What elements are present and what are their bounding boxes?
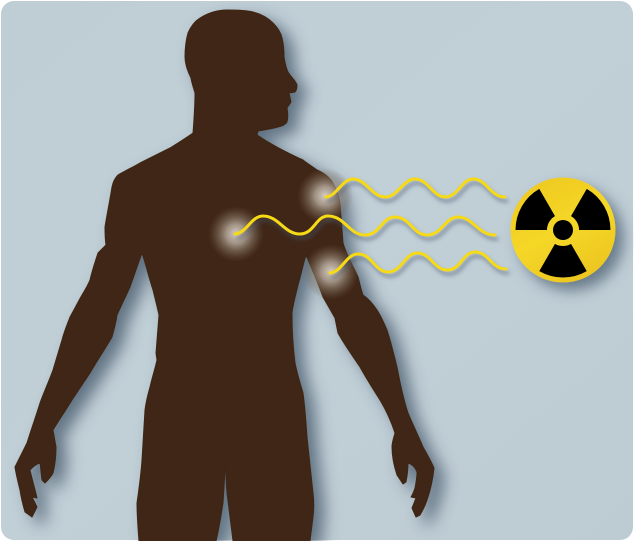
wave: bottom <box>330 252 506 273</box>
wave: middle <box>235 216 495 235</box>
trefoil blades <box>516 189 622 292</box>
radiation symbol <box>510 178 622 292</box>
wave: top <box>326 179 505 197</box>
radiation waves <box>235 179 506 273</box>
glow: lower arm impact point <box>303 244 359 300</box>
glow: upper arm impact point <box>297 168 353 224</box>
yellow disc <box>510 178 616 282</box>
human silhouette <box>15 10 434 541</box>
centre dot <box>553 220 573 240</box>
glow: chest impact point <box>208 206 264 262</box>
